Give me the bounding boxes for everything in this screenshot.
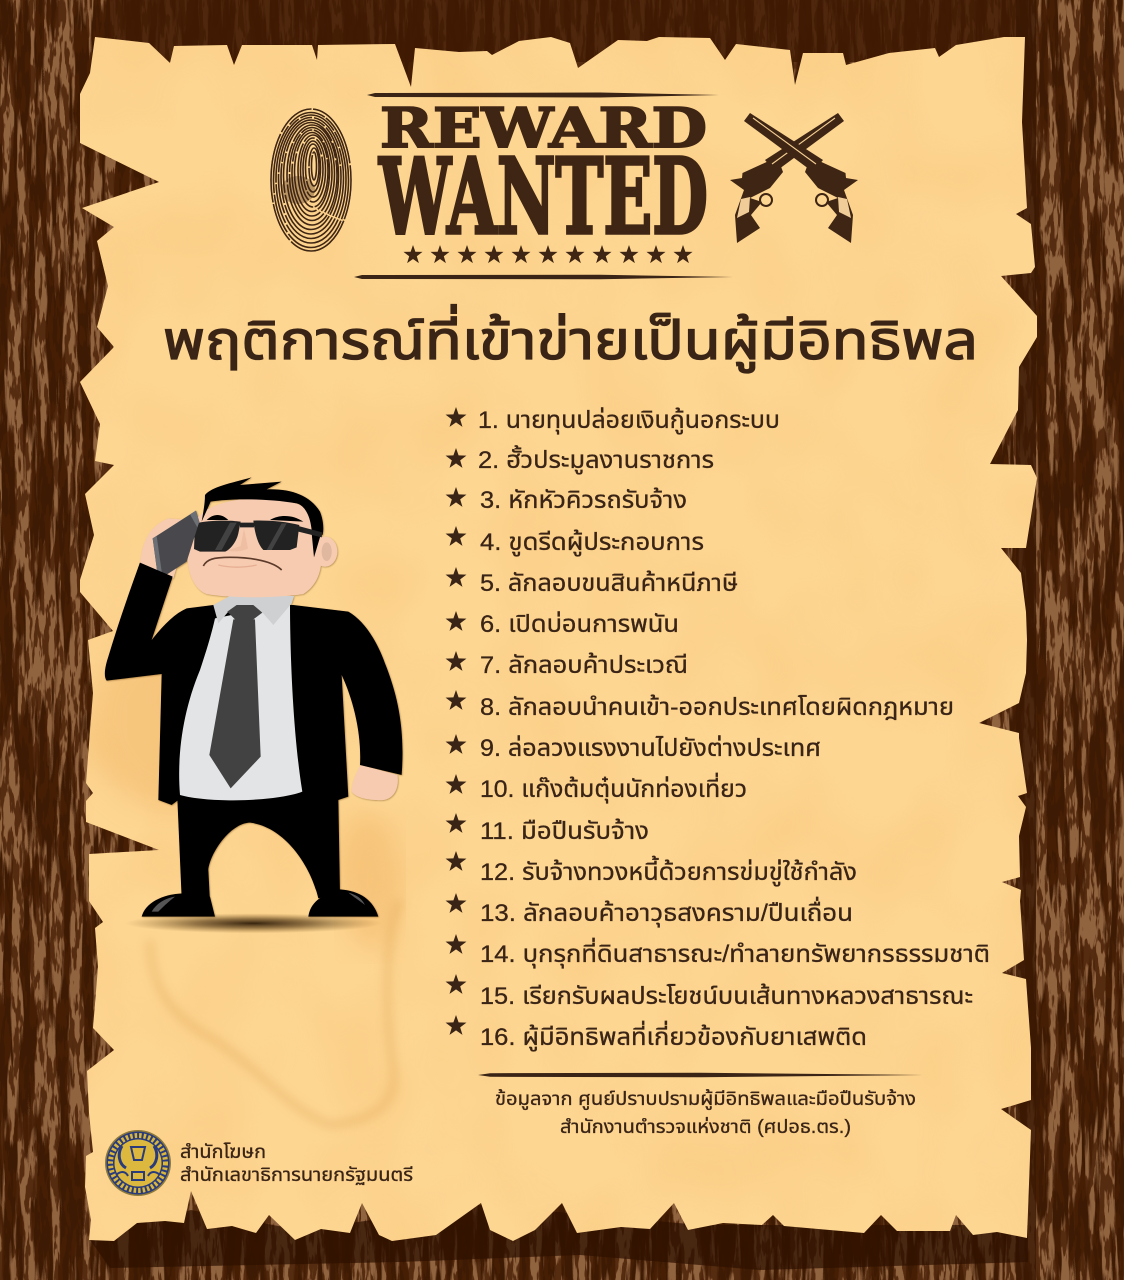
icon: crossed revolvers: [730, 113, 858, 243]
sleeve cuff: [132, 563, 173, 603]
character: man in black suit on the phone: [105, 477, 403, 933]
item 4: 4. ขูดรีดผู้ประกอบการ: [480, 529, 704, 557]
item 11: 11. มือปืนรับจ้าง: [480, 818, 649, 845]
hair: [202, 477, 323, 535]
item 12: [446, 851, 857, 887]
agency name: สำนักเลขาธิการนายกรัฐมนตรี: [180, 1165, 413, 1186]
revolver pointing right: [730, 113, 844, 243]
item 14: [446, 934, 990, 969]
item 12: 12. รับจ้างทวงหนี้ด้วยการข่มขู่ใช้กำลัง: [480, 855, 857, 887]
item 16: 16. ผู้มีอิทธิพลที่เกี่ยวข้องกับยาเสพติด: [480, 1020, 867, 1052]
head: [187, 498, 322, 597]
bottom rule: [354, 275, 733, 279]
item 16: [446, 1015, 867, 1052]
item 14: 14. บุกรุกที่ดินสาธารณะ/ทำลายทรัพยากรธรรมชาติ: [480, 937, 990, 969]
item 2: 2. ฮั้วประมูลงานราชการ: [478, 444, 714, 475]
wanted poster header: [271, 92, 858, 279]
fingerprint icon: [271, 109, 351, 251]
shoes: [142, 893, 215, 917]
raised hand: [140, 518, 190, 578]
source credit: ข้อมูลจาก ศูนย์ปราบปรามผู้มีอิทธิพลและมือปืนรับจ้าง: [495, 1087, 916, 1111]
item 13: [446, 893, 853, 928]
jacket: [105, 563, 403, 805]
item 11: [446, 813, 649, 845]
item 6: 6. เปิดบ่อนการพนัน: [480, 610, 679, 638]
item 15: 15. เรียกรับผลประโยชน์บนเส้นทางหลวงสาธารณะ: [480, 983, 973, 1010]
list of influential-person behaviours: [446, 406, 990, 1052]
right hand: [352, 765, 398, 800]
trousers: [177, 798, 340, 902]
item 9: 9. ล่อลวงแรงงานไปยังต่างประเทศ: [480, 734, 821, 762]
phone: [153, 511, 199, 580]
item 15: [446, 974, 973, 1010]
item 8: 8. ลักลอบนำคนเข้า-ออกประเทศโดยผิดกฎหมาย: [480, 694, 954, 721]
nose: [227, 528, 248, 551]
eyebrows: [207, 515, 303, 522]
shirt: [179, 603, 302, 800]
item 1: 1. นายทุนปล่อยเงินกู้นอกระบบ: [478, 406, 780, 435]
item 13: 13. ลักลอบค้าอาวุธสงคราม/ปืนเถื่อน: [480, 896, 853, 928]
item 10: 10. แก๊งต้มตุ๋นนักท่องเที่ยว: [480, 772, 747, 804]
sunglasses: [194, 521, 299, 552]
source credit: สำนักงานตำรวจแห่งชาติ (ศปอธ.ตร.): [560, 1115, 851, 1138]
agency name: [180, 1142, 413, 1186]
mouth: [203, 557, 282, 570]
top rule: [367, 92, 719, 98]
tie: [209, 605, 262, 788]
source credit: [478, 1073, 923, 1138]
row of stars: [403, 245, 693, 263]
ear: [313, 537, 337, 567]
item 3: 3. หักหัวคิวรถรับจ้าง: [480, 487, 687, 514]
agency name: สำนักโฆษก: [180, 1142, 266, 1163]
ground shadow: [125, 913, 382, 933]
REWARD heading: REWARD: [380, 96, 707, 160]
revolver pointing left: [744, 113, 858, 243]
item 5: 5. ลักลอบขนสินค้าหนีภาษี: [480, 570, 738, 597]
icon: government seal: [105, 1130, 171, 1196]
title: พฤติการณ์ที่เข้าข่ายเป็นผู้มีอิทธิพล: [163, 304, 978, 373]
item 7: 7. ลักลอบค้าประเวณี: [480, 652, 688, 679]
collar: [213, 596, 294, 625]
WANTED heading: WANTED: [378, 135, 708, 258]
